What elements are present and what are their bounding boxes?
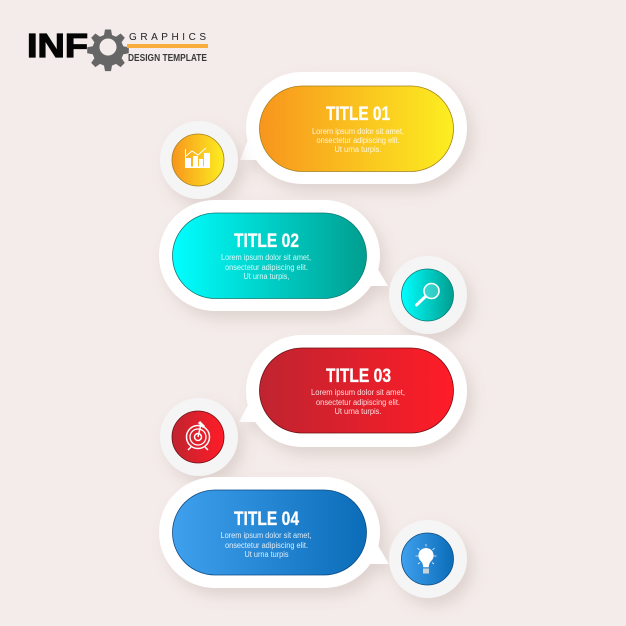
- panel: title 02: [159, 200, 467, 334]
- logo word DESIGN TEMPLATE: DESIGN TEMPLATE: [128, 52, 207, 64]
- speech bubble 03: [239, 335, 467, 447]
- pill 02: [172, 213, 366, 298]
- text block 04: onsectetur adipiscing elit.: [225, 541, 308, 550]
- logo word GRAPHICS: GRAPHICS: [129, 32, 206, 43]
- pill 03: [260, 348, 454, 433]
- text block 02: Lorem ipsum dolor sit amet,: [221, 253, 311, 262]
- icon badge 02: [389, 256, 467, 334]
- text block 04: [220, 531, 312, 559]
- icon: light bulb: [416, 544, 436, 574]
- speech bubble 02: [159, 200, 388, 311]
- logo word INF: INF: [27, 27, 88, 64]
- heading 04: TITLE 04: [234, 509, 299, 530]
- text block 04: Lorem ipsum dolor sit amet,: [220, 531, 312, 540]
- panel: title 04: [159, 477, 467, 598]
- icon: target: [186, 422, 210, 450]
- text block 02: onsectetur adipiscing elit.: [225, 263, 308, 272]
- text block 03: onsectetur adipiscing elit.: [316, 398, 400, 407]
- icon badge 03: [160, 398, 238, 476]
- icon: gear: [87, 30, 129, 71]
- heading 02: TITLE 02: [234, 231, 299, 252]
- text block 03: Ut urna turpis.: [334, 407, 382, 416]
- icon: magnifier: [416, 284, 439, 305]
- text block 01: onsectetur adipiscing elit.: [316, 136, 400, 145]
- speech bubble 01: [240, 72, 467, 184]
- speech bubble 04: [159, 477, 389, 588]
- text block 01: Ut urna turpis.: [334, 145, 382, 154]
- text block 02: Ut urna turpis,: [244, 272, 290, 281]
- icon: bar chart: [185, 148, 210, 168]
- heading 03: TITLE 03: [326, 366, 391, 387]
- text block 03: Lorem ipsum dolor sit amet,: [311, 388, 405, 397]
- panel: title 03: [160, 335, 467, 476]
- pill 01: [260, 86, 454, 172]
- panel: title 01: [160, 72, 467, 199]
- text block 03: [311, 388, 405, 416]
- text block 02: [221, 253, 311, 281]
- text block 01: [312, 127, 404, 154]
- icon badge 04: [389, 520, 467, 598]
- heading 01: TITLE 01: [326, 104, 390, 125]
- pill 04: [172, 490, 366, 575]
- logo orange rule: [127, 44, 208, 48]
- icon badge 01: [160, 121, 238, 199]
- logo: [27, 27, 208, 71]
- text block 01: Lorem ipsum dolor sit amet,: [312, 127, 404, 136]
- text block 04: Ut urna turpis: [244, 550, 288, 559]
